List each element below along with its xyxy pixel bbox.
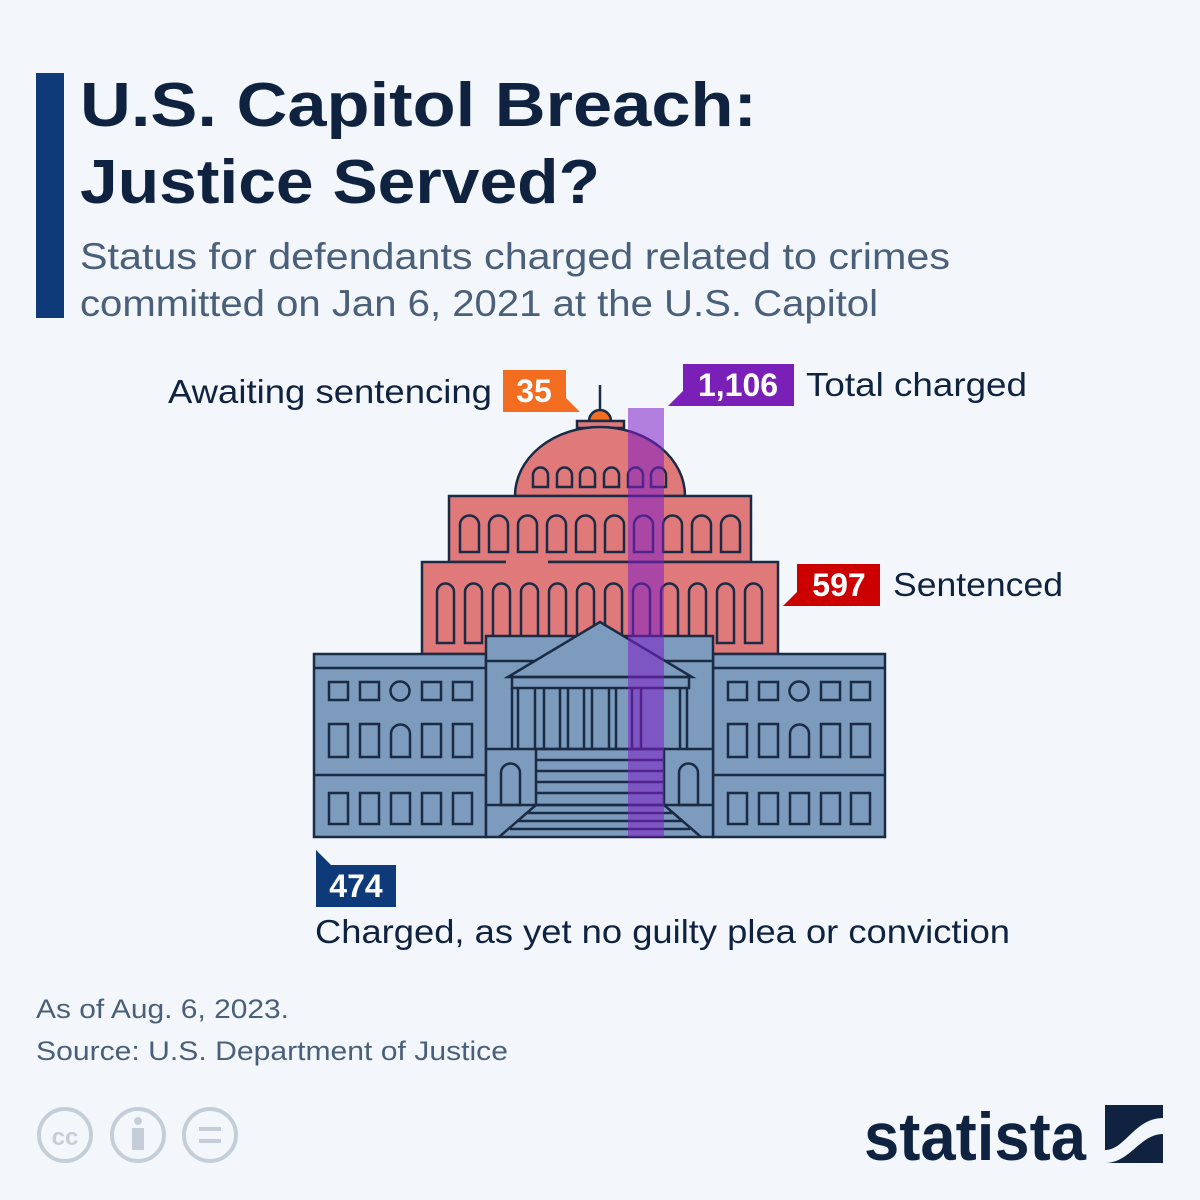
- title: Justice Served?: [80, 148, 600, 217]
- label: sentenced: Sentenced: [893, 566, 1063, 603]
- total charged bar: [628, 408, 664, 837]
- subtitle: [80, 236, 950, 324]
- label: charged no plea: 474: [329, 868, 383, 904]
- footer notes: [36, 994, 508, 1066]
- upper tier: [449, 496, 751, 562]
- subtitle: committed on Jan 6, 2021 at the U.S. Capitol: [80, 283, 878, 324]
- subtitle: Status for defendants charged related to crimes: [80, 236, 950, 277]
- capitol building: [314, 385, 885, 837]
- footer notes: As of Aug. 6, 2023.: [36, 994, 289, 1024]
- title: U.S. Capitol Breach:: [80, 71, 757, 140]
- statista logo: statista: [864, 1099, 1087, 1175]
- label: total charged: [668, 364, 1027, 406]
- dome: [515, 427, 685, 496]
- license icons: cc: [52, 1124, 78, 1151]
- label: charged no plea: Charged, as yet no guilty plea or conviction: [315, 913, 1010, 950]
- license icons: [39, 1109, 236, 1161]
- center portico: [486, 622, 713, 837]
- label: sentenced: [783, 564, 1063, 606]
- left wing: [314, 654, 486, 837]
- title: [80, 71, 757, 217]
- dome cap and spire: [577, 385, 624, 428]
- label: total charged: 1,106: [698, 367, 778, 403]
- right wing: [713, 654, 885, 837]
- label: charged no plea: [315, 850, 1010, 950]
- label: awaiting sentencing: [168, 370, 580, 412]
- footer notes: Source: U.S. Department of Justice: [36, 1036, 508, 1066]
- label: awaiting sentencing: Awaiting sentencing: [168, 373, 492, 410]
- title accent bar: [36, 73, 64, 318]
- label: total charged: Total charged: [806, 366, 1027, 403]
- label: sentenced: 597: [812, 567, 866, 603]
- label: awaiting sentencing: 35: [516, 373, 552, 409]
- lower tier: [422, 562, 778, 654]
